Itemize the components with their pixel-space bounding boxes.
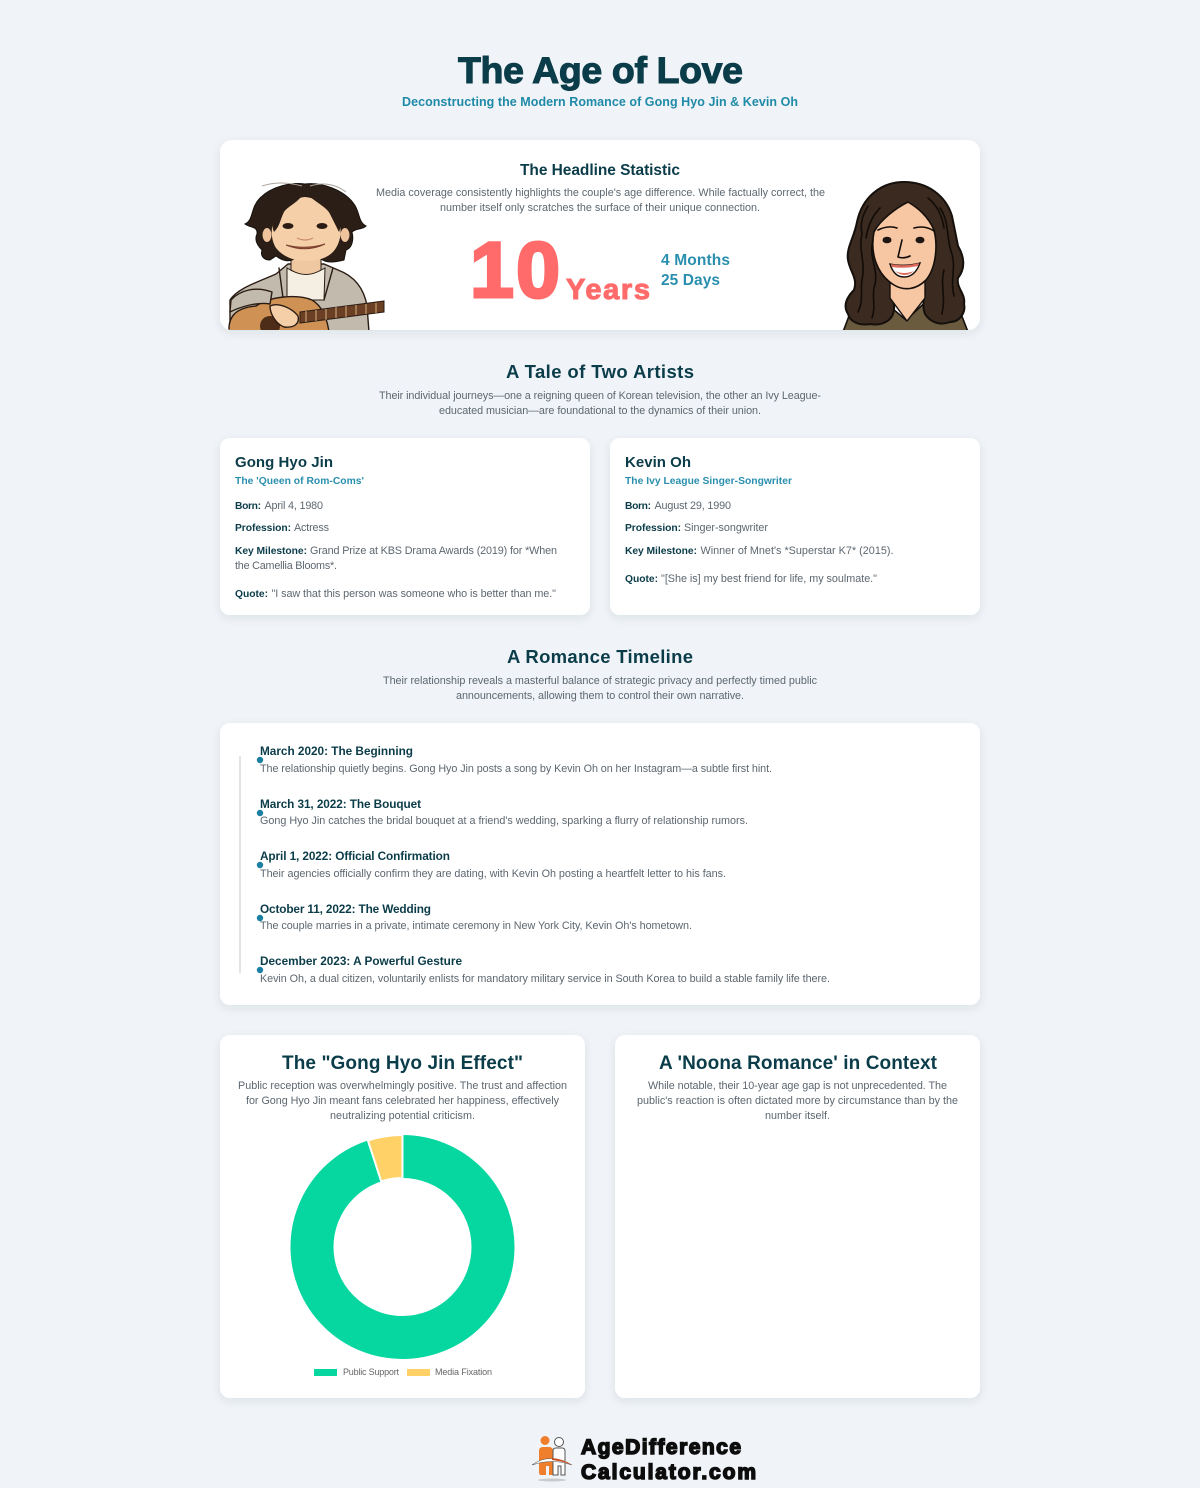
timeline event: March 2020 [257, 744, 772, 775]
big number: 10 years [470, 225, 650, 314]
fact: profession: Profession: [235, 523, 291, 534]
timeline event: March 31, 2022: Gong Hyo Jin catches the bridal bouquet at a friend's wedding, sparking a flurry of relationship rumors. [260, 815, 748, 827]
text block: timeline description: Their relationship reveals a masterful balance of strategic privacy and perfectly timed public [383, 675, 818, 687]
fact: profession: Profession: [625, 523, 681, 534]
logo text: Calculator.com [581, 1461, 756, 1484]
fact: quote: Quote: [625, 574, 658, 585]
subheading: role: The Ivy League Singer-Songwriter [625, 476, 792, 487]
heading: noona romance: A 'Noona Romance' in Context [659, 1053, 938, 1074]
logo [532, 1436, 756, 1484]
title: The Age of Love [458, 49, 743, 91]
timeline event: December 2023: December 2023: A Powerful Gesture [260, 954, 462, 968]
text block: headline description: Media coverage consistently highlights the couple's age difference. While factually correct, the [376, 187, 825, 199]
timeline event: March 2020: The relationship quietly begins. Gong Hyo Jin posts a song by Kevin Oh on her Instagram—a subtle first hint. [260, 763, 772, 775]
timeline event: April 1, 2022: Their agencies officially confirm they are dating, with Kevin Oh posting a heartfelt letter to his fans. [260, 868, 726, 880]
panel: headline statistic [220, 140, 980, 336]
logo text: AgeDifference [581, 1436, 741, 1459]
subtitle: Deconstructing the Modern Romance of Gong Hyo Jin & Kevin Oh [402, 95, 798, 109]
chart legend [314, 1367, 492, 1377]
timeline event: April 1, 2022: April 1, 2022: Official Confirmation [260, 849, 450, 863]
big number: 10 years: 10 [470, 225, 560, 314]
panel: Gong Hyo Jin profile [220, 438, 590, 615]
fact: key milestone: Key Milestone: [235, 546, 307, 557]
stat detail: months and days: 25 Days [661, 272, 720, 289]
text block: effect description: Public reception was overwhelmingly positive. The trust and affection [238, 1080, 567, 1092]
text block: noona description [637, 1080, 958, 1122]
illustration: woman [843, 182, 968, 332]
heading: a tale of two artists [379, 361, 821, 417]
fact: born: Born: [235, 501, 261, 512]
chart legend: Media Fixation [435, 1367, 492, 1377]
title [402, 49, 798, 109]
fact: profession [625, 522, 768, 534]
fact: quote: "I saw that this person was someone who is better than me." [272, 588, 556, 600]
fact: key milestone: Key Milestone: [625, 546, 697, 557]
fact: profession [235, 522, 330, 534]
panel: noona romance [615, 1035, 980, 1398]
donut chart [312, 1135, 493, 1338]
fact: profession: Actress [294, 522, 330, 534]
timeline event: October 11, 2022 [257, 902, 692, 932]
infographic page [218, 56, 982, 1482]
text block: noona description: While notable, their 10-year age gap is not unprecedented. The [648, 1080, 947, 1092]
text block: headline description: number itself only scratches the surface of their unique connection. [440, 202, 760, 214]
text block: timeline description: announcements, allowing them to control their own narrative. [456, 690, 744, 702]
subheading: role: The 'Queen of Rom-Coms' [235, 476, 364, 487]
fact: born: Born: [625, 501, 651, 512]
timeline event: December 2023 [257, 954, 830, 985]
timeline event: March 31, 2022: March 31, 2022: The Bouquet [260, 797, 421, 811]
text block: headline description [376, 187, 825, 214]
text block: effect description: for Gong Hyo Jin meant fans celebrated her happiness, effectively [246, 1095, 560, 1107]
text block: effect description [238, 1080, 567, 1122]
text block: noona description: public's reaction is often dictated more by circumstance than by the [637, 1095, 958, 1107]
heading: Gong Hyo Jin effect: The "Gong Hyo Jin Effect" [282, 1053, 523, 1074]
chart legend: Public Support [343, 1367, 399, 1377]
big number: 10 years: Years [566, 274, 650, 306]
timeline event: March 2020: March 2020: The Beginning [260, 744, 413, 758]
fact: born [235, 500, 323, 512]
panel: timeline [220, 723, 980, 1005]
heading: Kevin Oh: Kevin Oh [625, 454, 691, 471]
logo text [581, 1436, 756, 1484]
text block: artists description [379, 390, 821, 417]
timeline event: April 1, 2022 [257, 849, 726, 880]
text block: effect description: neutralizing potential criticism. [330, 1110, 475, 1122]
illustration: man with guitar [229, 183, 384, 336]
fact: key milestone: Grand Prize at KBS Drama Awards (2019) for *When [310, 545, 557, 557]
text block: timeline description [383, 675, 818, 702]
stat detail: months and days [661, 252, 730, 289]
text block: noona description: number itself. [765, 1110, 830, 1122]
timeline event: October 11, 2022: The couple marries in a private, intimate ceremony in New York City, Kevin Oh's hometown. [260, 920, 692, 932]
fact: key milestone: the Camellia Blooms*. [235, 560, 337, 572]
timeline event: December 2023: Kevin Oh, a dual citizen, voluntarily enlists for mandatory military service in South Korea to build a stable family life there. [260, 973, 830, 985]
timeline event: March 31, 2022 [257, 797, 748, 827]
fact: born: April 4, 1980 [264, 500, 323, 512]
heading: Gong Hyo Jin: Gong Hyo Jin [235, 454, 333, 471]
fact: quote: Quote: [235, 589, 268, 600]
heading: a tale of two artists: A Tale of Two Artists [506, 361, 694, 382]
panel: Kevin Oh profile [610, 438, 980, 615]
fact: quote: "[She is] my best friend for life, my soulmate." [661, 573, 877, 585]
fact: key milestone [235, 545, 557, 572]
stat detail: months and days: 4 Months [661, 252, 730, 269]
heading: headline statistic: The Headline Statistic [520, 162, 680, 179]
icon: couple logo [532, 1436, 572, 1482]
fact: key milestone: Winner of Mnet's *Superstar K7* (2015). [700, 545, 894, 557]
heading: a romance timeline: A Romance Timeline [507, 646, 693, 667]
heading: a romance timeline [383, 646, 818, 702]
fact: profession: Singer-songwriter [684, 522, 768, 534]
timeline event: October 11, 2022: October 11, 2022: The Wedding [260, 902, 431, 916]
panel: Gong Jin effect [220, 1035, 585, 1398]
text block: artists description: educated musician—are foundational to the dynamics of their union. [439, 405, 761, 417]
fact: born: August 29, 1990 [654, 500, 731, 512]
text block: artists description: Their individual journeys—one a reigning queen of Korean television, the other an Ivy League- [379, 390, 821, 402]
